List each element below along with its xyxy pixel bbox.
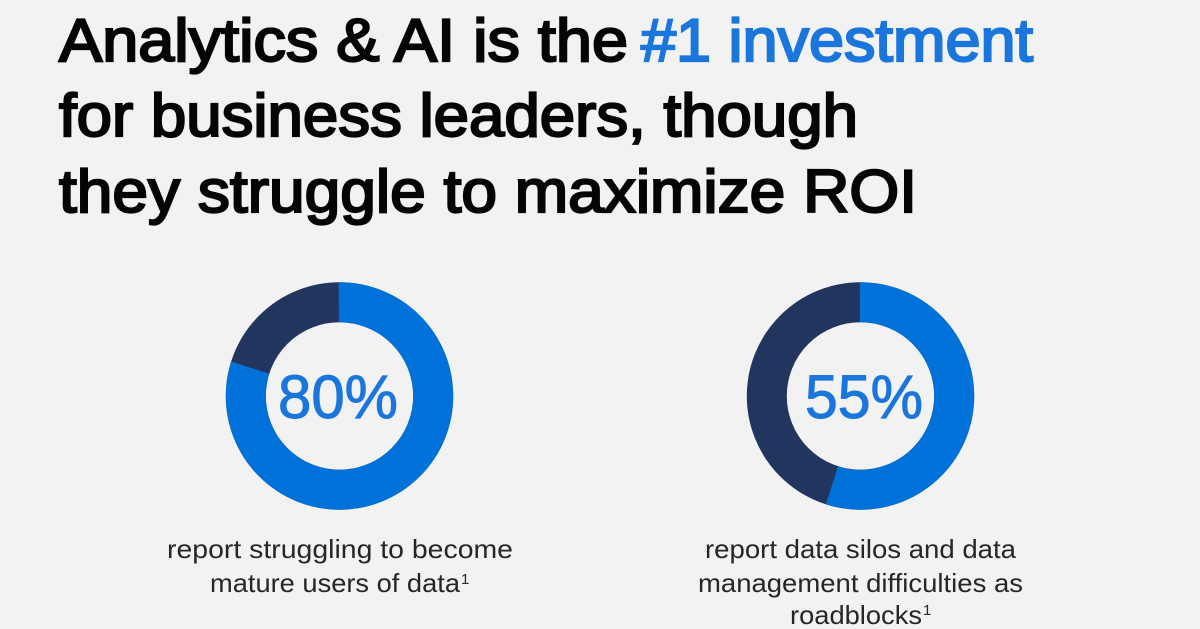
caption: 80%: mature users of data bbox=[210, 568, 461, 598]
caption: 80% bbox=[167, 534, 513, 598]
caption: 80%: 1 bbox=[461, 571, 469, 588]
caption: 55%: management difficulties as bbox=[698, 568, 1023, 598]
title: Analytics & AI is the bbox=[59, 7, 628, 74]
caption: 55%: 1 bbox=[923, 602, 931, 619]
donut chart: 55% bbox=[767, 302, 954, 490]
title: for business leaders, though bbox=[59, 82, 858, 149]
title bbox=[59, 7, 1033, 225]
title: they struggle to maximize ROI bbox=[59, 158, 917, 225]
caption: 55% bbox=[698, 534, 1023, 629]
donut chart: 80% bbox=[246, 302, 433, 490]
caption: 80%: report struggling to become bbox=[167, 534, 513, 564]
donut chart: 80%: 80% bbox=[278, 363, 398, 431]
donut chart: 55%: 55% bbox=[805, 363, 923, 431]
caption: 55%: report data silos and data bbox=[705, 534, 1017, 564]
title: #1 investment bbox=[641, 7, 1033, 74]
